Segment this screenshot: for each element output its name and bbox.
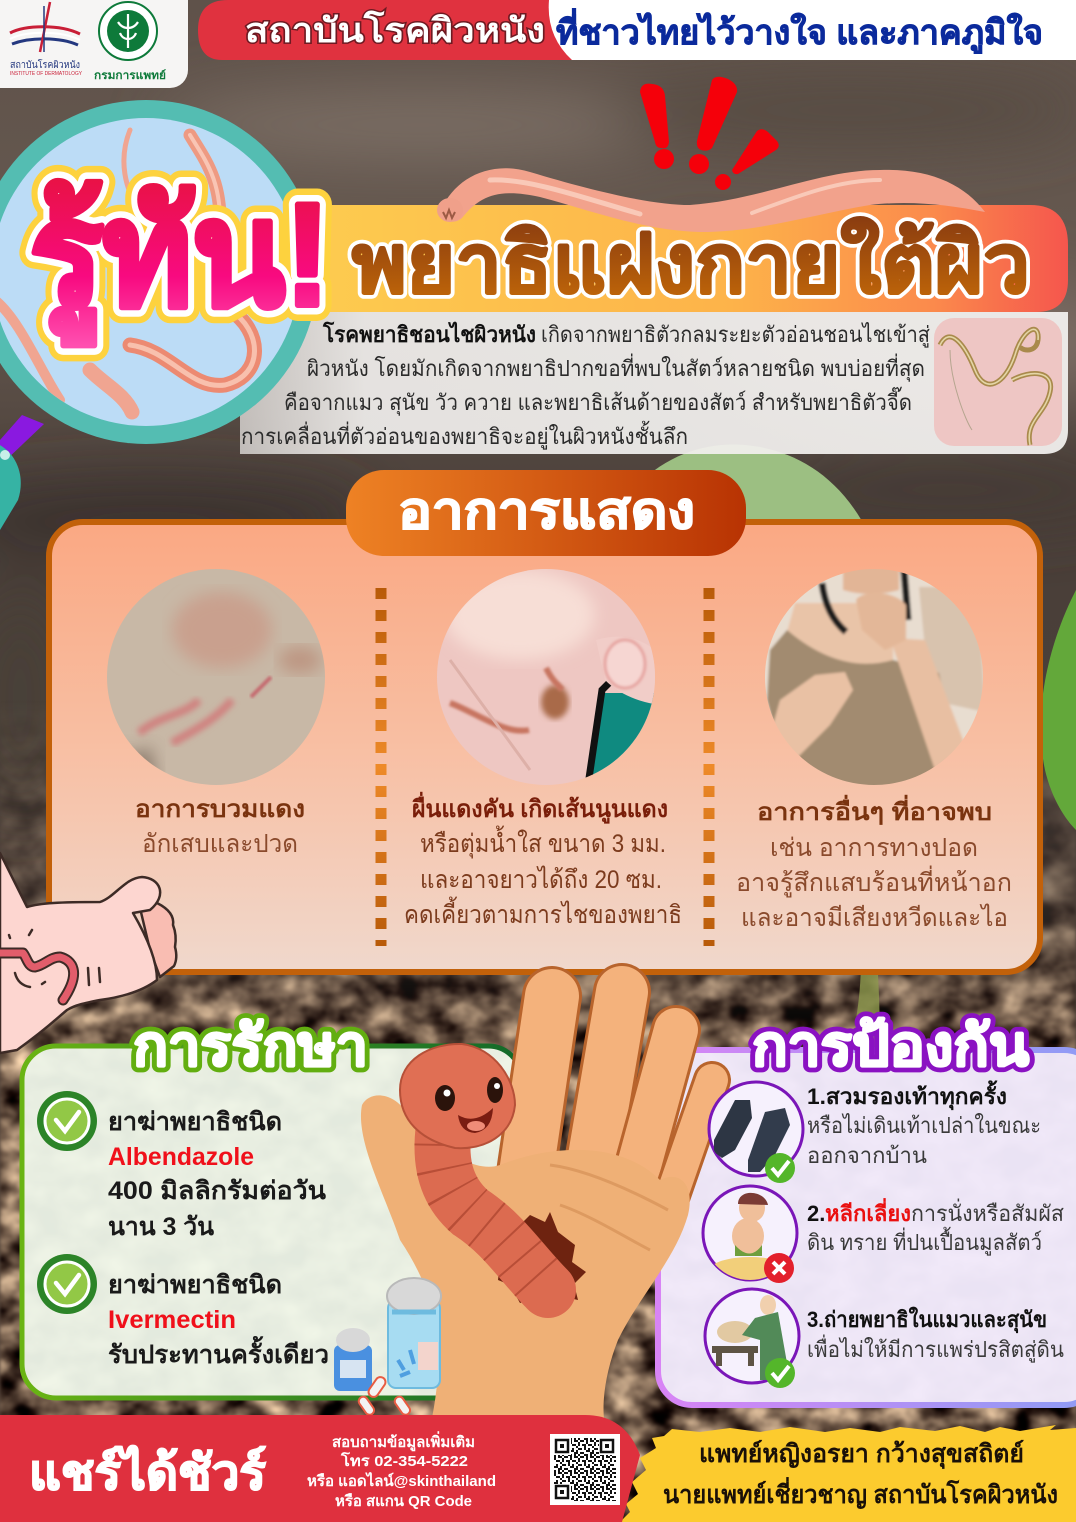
magnifier handle — [0, 415, 44, 530]
contact details: โทร 02-354-5222 — [340, 1451, 468, 1470]
icon: institute of dermatology logo: INSTITUTE OF DERMATOLOGY — [10, 71, 83, 77]
text: avoid contact: 2. — [807, 1201, 825, 1226]
doctor credit: แพทย์หญิงอรยา กว้างสุขสถิตย์ — [699, 1439, 1024, 1470]
illustration: hand with worm — [334, 992, 712, 1418]
treatment text: Ivermectin: Ivermectin — [108, 1306, 236, 1334]
panel: prevention — [658, 1014, 1076, 1405]
text: avoid contact: ดิน ทราย ที่ปนเปื้อนมูลสัตว์ — [807, 1227, 1042, 1256]
text: deworm pets: 3.ถ่ายพยาธิในแมวและสุนัข — [807, 1306, 1047, 1334]
QR code — [550, 1434, 620, 1505]
treatment text: Ivermectin: รับประทานครั้งเดียว — [108, 1335, 329, 1369]
photo: woman coughing — [765, 569, 983, 785]
text: avoid contact: การนั่งหรือสัมผัส — [911, 1198, 1065, 1226]
text: wear shoes: หรือไม่เดินเท้าเปล่าในขณะ — [807, 1113, 1041, 1138]
photo: larva under microscope — [934, 318, 1062, 446]
panel: treatment — [22, 1014, 522, 1398]
medicine bottles and pills — [334, 1278, 441, 1416]
contact details: หรือ แอดไลน์@skinthailand — [307, 1471, 496, 1490]
contact details: สอบถามข้อมูลเพิ่มเติม — [332, 1431, 475, 1452]
caption: symptom 3: อาการอื่นๆ ที่อาจพบ — [757, 794, 992, 826]
panel: symptoms — [49, 470, 1040, 972]
caption: symptom 3: อาจรู้สึกแสบร้อนที่หน้าอก — [736, 865, 1012, 898]
magnifier with worms — [0, 100, 318, 530]
contact details — [307, 1431, 496, 1510]
worm head with face — [400, 1044, 515, 1148]
text: deworm pets — [807, 1306, 1064, 1363]
intro paragraph: ผิวหนัง โดยมักเกิดจากพยาธิปากขอที่พบในสัตว์หลายชนิด พบบ่อยที่สุด — [307, 353, 925, 382]
treatment text: Albendazole — [108, 1108, 326, 1241]
text: wear shoes: 1.สวมรองเท้าทุกครั้ง — [807, 1080, 1007, 1111]
icon: child playing in soil — [703, 1186, 797, 1283]
treatment text: Albendazole: 400 มิลลิกรัมต่อวัน — [108, 1177, 326, 1205]
icon: check badge 1 — [37, 1091, 97, 1151]
icon: ministry of public health seal — [94, 2, 166, 82]
headline: รู้ทัน!: รู้ทัน! — [30, 173, 330, 346]
title banner — [320, 205, 1068, 312]
intro paragraph: การเคลื่อนที่ตัวอ่อนของพยาธิจะอยู่ในผิวหนังชั้นลึก — [241, 421, 688, 450]
footer: red contact band — [0, 1415, 640, 1522]
contact details: หรือ สแกน QR Code — [335, 1493, 472, 1510]
header ribbon — [198, 0, 1076, 60]
intro paragraph: โรคพยาธิชอนไชผิวหนัง — [322, 321, 536, 347]
intro paragraph: คือจากแมว สุนัข วัว ควาย และพยาธิเส้นด้ายของสัตว์ สำหรับพยาธิตัวจี๊ด — [284, 386, 912, 416]
headline: รู้ทัน!: รู้ทัน! — [30, 173, 330, 346]
text: avoid contact: หลีกเลี่ยง — [825, 1197, 911, 1226]
heading: institute name: สถาบันโรคผิวหนัง — [245, 10, 545, 50]
text: wear shoes: ออกจากบ้าน — [807, 1143, 927, 1168]
caption: symptom 2: หรือตุ่มน้ำใส ขนาด 3 มม. — [420, 825, 666, 859]
caption: symptom 2: และอาจยาวได้ถึง 20 ซม. — [420, 865, 662, 894]
icon: institute of dermatology logo — [10, 2, 83, 77]
treatment text: Albendazole: ยาฆ่าพยาธิชนิด — [108, 1108, 282, 1136]
caption: symptom 1: อักเสบและปวด — [142, 830, 298, 858]
headline: พยาธิแฝงกายใต้ผิว: พยาธิแฝงกายใต้ผิว — [352, 217, 1030, 310]
dotted divider right — [704, 588, 714, 946]
icon: institute of dermatology logo: สถาบันโรคผิวหนัง — [10, 58, 80, 71]
footer: yellow brush band — [620, 1425, 1076, 1522]
photo: red itchy rash on foot — [437, 569, 655, 785]
photo: swollen red rash — [107, 569, 325, 785]
caption: symptom 2 — [404, 791, 682, 929]
caption: symptom 1: อาการบวมแดง — [135, 796, 305, 823]
caption: symptom 1 — [135, 796, 305, 858]
heading: treatment: การรักษา — [133, 1014, 368, 1077]
icon: check badge 2 — [37, 1254, 97, 1314]
text: deworm pets: เพื่อไม่ให้มีการแพร่ปรสิตสู่ดิน — [807, 1334, 1064, 1363]
caption: symptom 3 — [736, 794, 1012, 932]
heading: prevention: การป้องกัน — [752, 1014, 1029, 1077]
worms inside the lens — [0, 130, 255, 412]
intro text panel — [240, 312, 1068, 454]
fingers — [525, 992, 712, 1195]
worm on top of banner — [437, 168, 985, 232]
dotted divider left — [376, 588, 386, 946]
intro paragraph — [241, 321, 931, 450]
heading: slogan: ที่ชาวไทยไว้วางใจ และภาคภูมิใจ — [556, 8, 1043, 54]
text: avoid contact — [807, 1197, 1065, 1256]
caption: symptom 3: เช่น อาการทางปอด — [770, 834, 978, 862]
treatment text: Ivermectin: ยาฆ่าพยาธิชนิด — [108, 1271, 282, 1299]
treatment text: Ivermectin — [108, 1271, 329, 1369]
icon: vet deworming a dog — [705, 1289, 799, 1388]
prevention items — [703, 1080, 1065, 1388]
headline: รู้ทัน!: รู้ทัน! — [30, 173, 330, 346]
caption: symptom 3: และอาจมีเสียงหวีดและไอ — [741, 903, 1008, 932]
caption: symptom 2: ผื่นแดงคัน เกิดเส้นนูนแดง — [412, 791, 668, 824]
text: wear shoes — [807, 1080, 1041, 1168]
heading: treatment: การรักษา — [133, 1014, 368, 1077]
worm body — [442, 1120, 548, 1290]
illustration: foot with creeping worm — [0, 853, 176, 1053]
wound — [490, 1212, 586, 1308]
logo panel — [0, 0, 188, 88]
share slogan: แชร์ได้ชัวร์ — [29, 1444, 266, 1500]
intro paragraph: เกิดจากพยาธิตัวกลมระยะตัวอ่อนชอนไชเข้าสู่ — [541, 322, 931, 348]
icon: shoes — [709, 1082, 803, 1183]
caption: symptom 2: คดเคี้ยวตามการไชของพยาธิ — [404, 896, 682, 929]
icon: ministry of public health seal: กรมการแพทย์ — [94, 69, 166, 82]
treatment text: Albendazole: นาน 3 วัน — [108, 1213, 214, 1241]
treatment text: Albendazole: Albendazole — [108, 1143, 254, 1171]
leaves behind the panels — [636, 444, 1076, 1060]
headline: พยาธิแฝงกายใต้ผิว: พยาธิแฝงกายใต้ผิว — [352, 217, 1030, 310]
heading: prevention: การป้องกัน — [752, 1014, 1029, 1077]
doctor credit: นายแพทย์เชี่ยวชาญ สถาบันโรคผิวหนัง — [663, 1477, 1058, 1509]
doctor credit — [663, 1439, 1058, 1509]
exclamation marks — [640, 77, 779, 190]
heading pill: symptoms — [346, 470, 746, 556]
heading pill: symptoms: อาการแสดง — [398, 483, 695, 539]
